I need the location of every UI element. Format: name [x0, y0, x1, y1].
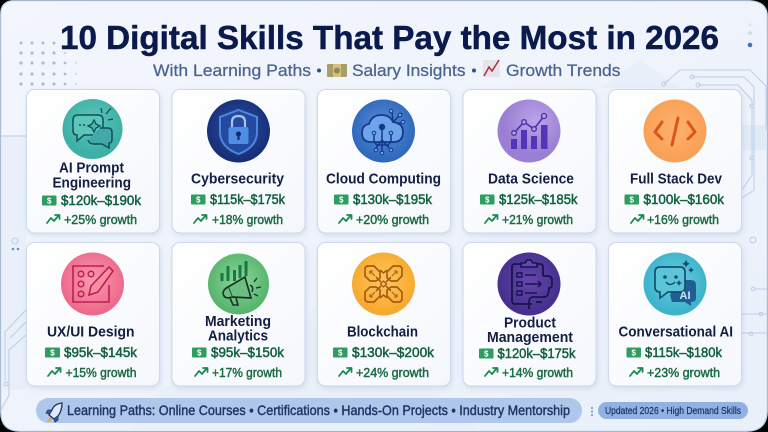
salary: $	[485, 196, 490, 204]
title: 10 Digital Skills That Pay the Most in 2026	[60, 20, 719, 57]
skill name	[52, 161, 131, 192]
decorative three dots top right	[748, 23, 752, 47]
salary: $	[50, 348, 55, 358]
growth: +16% growth	[647, 212, 719, 227]
growth: +15% growth	[66, 365, 136, 380]
growth: +25% growth	[64, 212, 137, 227]
icon: rocket	[46, 403, 62, 422]
skill name: Full Stack Dev	[630, 172, 723, 188]
growth: +14% growth	[502, 365, 573, 380]
skill name	[487, 316, 573, 346]
salary: $	[629, 196, 634, 204]
skill name: Management	[487, 330, 573, 346]
skill name: Conversational AI	[618, 325, 733, 341]
panel: Product Management	[463, 242, 596, 386]
growth: +17% growth	[212, 365, 282, 380]
salary: $115k–$175k	[210, 191, 286, 207]
icon: clipboard checklist	[498, 252, 560, 316]
salary: $	[197, 348, 202, 358]
subtitle: Salary Insights	[352, 61, 466, 80]
subtitle: With Learning Paths	[153, 61, 311, 80]
skill name: UX/UI Design	[47, 325, 134, 341]
icon: chat bubbles with sparkle	[62, 99, 122, 159]
salary: $	[631, 348, 636, 358]
icon: smiling chat bubble with AI	[644, 252, 706, 316]
salary: $	[339, 196, 344, 204]
footer: learning paths pill: Learning Paths: Online Courses • Certifications • Hands-On Projects • Industry Mentorship	[67, 402, 570, 418]
footer: learning paths pill	[36, 398, 582, 423]
panel: Cloud Computing	[318, 90, 450, 233]
icon: shield with lock	[207, 100, 270, 162]
subtitle	[153, 60, 620, 80]
salary: $95k–$145k	[64, 344, 138, 360]
salary: $100k–$160k	[644, 191, 725, 207]
panel: UX/UI Design	[26, 242, 160, 386]
decorative footer dots	[591, 407, 593, 416]
panel: AI Prompt Engineering	[26, 90, 160, 233]
icon: smiling chat bubble with AI: AI	[680, 290, 690, 302]
skill name: Cloud Computing	[326, 172, 441, 188]
salary: $	[338, 348, 343, 358]
salary: $120k–$175k	[498, 345, 576, 361]
salary: $120k–$190k	[61, 192, 142, 208]
decorative circuit right lower	[742, 237, 767, 336]
panel: Data Science	[463, 90, 596, 233]
icon: megaphone with bars	[208, 254, 269, 314]
skill name: Engineering	[52, 176, 131, 192]
skill name: Analytics	[208, 329, 268, 345]
icon: money emoji	[327, 64, 347, 77]
growth: +23% growth	[647, 365, 720, 380]
salary: $130k–$195k	[353, 191, 433, 207]
icon: wireframe and pencil	[61, 252, 124, 316]
decorative dot grid	[19, 42, 77, 86]
panel: Full Stack Dev	[608, 90, 742, 233]
decorative circuit top right	[662, 70, 766, 198]
salary: $	[484, 350, 489, 358]
icon: cloud circuit	[352, 100, 415, 162]
decorative circuit left	[1, 136, 26, 410]
skill name: AI Prompt	[59, 161, 124, 177]
salary: $	[47, 196, 52, 206]
skill name: Product	[504, 316, 556, 332]
panel: Conversational AI	[608, 242, 742, 386]
salary: $130k–$200k	[352, 344, 435, 360]
panel: Marketing Analytics	[172, 242, 305, 386]
skill name: Marketing	[205, 314, 271, 330]
footer: updated badge	[598, 402, 748, 419]
subtitle: Growth Trends	[506, 61, 620, 80]
panel: Cybersecurity	[172, 90, 305, 233]
icon: code brackets	[644, 100, 706, 162]
skill name: Data Science	[488, 172, 574, 188]
salary: $	[196, 196, 201, 204]
salary: $95k–$150k	[211, 344, 285, 360]
skill name	[205, 314, 271, 345]
growth: +24% growth	[356, 365, 429, 380]
icon: linked blocks	[352, 252, 415, 316]
growth: +21% growth	[502, 212, 573, 227]
growth: +18% growth	[212, 212, 283, 227]
skill name: Cybersecurity	[191, 172, 285, 188]
growth: +20% growth	[356, 212, 429, 227]
salary: $125k–$185k	[499, 191, 578, 207]
panel: Blockchain	[318, 242, 450, 386]
icon: chart emoji	[483, 60, 500, 77]
salary: $115k–$180k	[645, 344, 723, 360]
skill name: Blockchain	[347, 325, 418, 341]
footer: updated badge: Updated 2026 • High Demand Skills	[605, 406, 741, 417]
icon: bar chart with line	[498, 100, 560, 162]
